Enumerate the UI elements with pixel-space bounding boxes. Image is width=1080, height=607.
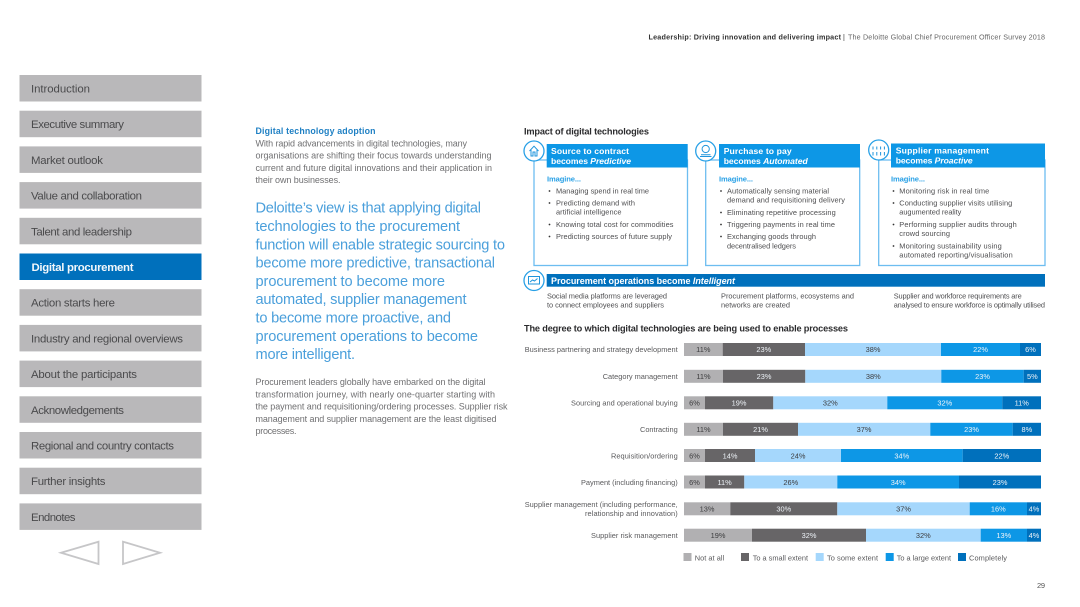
closing paragraph: processes. [256,426,296,436]
intro paragraph: With rapid advancements in digital technologies, many [256,138,468,148]
bullet list: automated reporting/visualisation [899,251,1013,260]
row: sourcing and operational buying: 19% [732,398,747,408]
nav item: Introduction [20,75,202,102]
closing paragraph: transformation journey, with nearly one-quarter starting with [256,389,495,399]
row: supplier management: 16% [991,504,1006,514]
pull quote: to become more proactive, and [256,310,451,326]
bullet list: demand and requisitioning delivery [727,196,845,205]
intro paragraph: organisations are shifting their focus towards understanding [256,151,492,161]
intro paragraph: their own businesses. [256,175,340,185]
row: supplier risk management: 4% [1029,531,1040,540]
row: supplier management: 37% [896,504,911,514]
chart legend: Completely [969,554,1007,562]
bullet list: Monitoring sustainability using [899,242,1002,251]
banner note: workforce: analysed to ensure workforce is optimally utilised [894,300,1045,309]
panel: purchase to pay [696,141,860,266]
row: supplier risk management: Supplier risk management [591,531,678,540]
pull quote: more intelligent. [256,347,355,363]
row: supplier risk management: 32% [802,531,817,540]
banner note: platforms: networks are created [721,300,790,309]
nav item: Introduction: Introduction [31,84,90,96]
row: payment: 6% [689,478,700,487]
pull quote: Deloitte’s view is that applying digital [256,201,481,217]
panel: purchase to pay: Imagine... [719,174,753,184]
text column: digital technology adoption [256,126,508,436]
nav item: Industry and regional overviews: Industry and regional overviews [31,333,183,345]
chart legend: To a large extent [897,554,951,562]
row: business partnering: 11% [696,345,711,354]
row: business partnering: 23% [756,345,772,354]
bullet list: augumented reality [899,208,962,217]
row: contracting: 21% [753,425,768,434]
icon: next arrow [123,542,160,564]
panel: supplier management [869,140,1045,266]
row: business partnering: Business partnering and strategy development [525,345,678,354]
bullet list [720,187,845,251]
panel: source to contract: Source to contract [551,146,629,156]
bullet list [549,187,674,241]
row: contracting: 37% [857,425,872,434]
row: requisition/ordering [611,449,1041,462]
row: business partnering [525,343,1041,356]
row: requisition/ordering: 22% [994,451,1010,460]
panel: procurement operations banner [524,270,1045,309]
panel: supplier management: Supplier management [896,146,989,156]
row: category management: Category management [603,372,678,381]
heading: impact of digital technologies: Impact of digital technologies [524,126,649,136]
closing paragraph: Procurement leaders globally have embarked on the digital [256,377,486,387]
bullet list: Managing spend in real time [556,187,649,196]
banner note: social media: to connect employees and suppliers [547,300,664,309]
panel: procurement operations banner: Procurement operations become Intelligent [551,276,736,286]
row: category management [603,370,1041,383]
row: sourcing and operational buying: 32% [937,398,953,408]
row: payment: 26% [783,478,799,487]
panel: purchase to pay: Purchase to pay [724,146,792,156]
row: sourcing and operational buying: 6% [689,398,700,408]
nav item: Digital procurement (active): Digital procurement [32,262,134,274]
row: contracting: 8% [1021,425,1033,434]
pull quote: automated, supplier management [256,292,466,308]
row: contracting: Contracting [640,425,678,434]
bullet list: Monitoring risk in real time [899,187,989,196]
banner note: workforce: Supplier and workforce requirements are [894,291,1022,300]
icon: group of people [869,140,889,160]
nav item: Digital procurement (active) [20,254,202,280]
banner note: workforce [894,291,1045,309]
row: sourcing and operational buying: 32% [823,398,838,408]
banner note: platforms [721,291,854,309]
row: business partnering: 6% [1025,345,1036,354]
sidebar navigation [20,75,202,530]
nav item: Action starts here [20,289,202,316]
chart legend: To some extent [827,554,878,562]
row: supplier management: 13% [700,504,715,514]
row: payment: 11% [717,478,732,487]
banner note: social media: Social media platforms are leveraged [547,291,667,300]
nav item: About the participants: About the participants [31,369,137,381]
row: supplier risk management [591,529,1041,542]
nav item: Further insights [20,468,202,494]
panel: source to contract [524,141,688,266]
nav item: Value and collaboration: Value and collaboration [31,191,142,203]
row: payment: Payment (including financing) [581,478,678,487]
nav item: Industry and regional overviews [20,325,202,351]
panel: supplier management: becomes Proactive [896,156,973,166]
row: payment: 23% [993,478,1008,487]
row: contracting: 11% [696,425,711,434]
bullet list: Automatically sensing material [727,187,829,196]
nav item: Value and collaboration [20,182,202,209]
running header [648,32,1045,42]
row: category management: 23% [757,372,772,381]
nav item: Acknowledgements: Acknowledgements [31,405,124,417]
bullet list: Knowing total cost for commodities [556,220,674,229]
bullet list: Performing supplier audits through [899,220,1017,229]
bullet list: Eliminating repetitive processing [727,208,836,217]
pull quote: function will enable strategic sourcing to [256,237,505,253]
pull quote: procurement to become more [256,274,445,290]
row: supplier risk management: 13% [996,531,1012,540]
row: supplier risk management: 19% [711,531,726,540]
bullet list: Triggering payments in real time [727,220,835,229]
closing paragraph: management and supplier management are the least digitised [256,414,496,424]
bullet list: artificial intelligence [556,208,622,217]
nav item: Executive summary [20,111,202,137]
running header: The Deloitte Global Chief Procurement Officer Survey 2018 [848,32,1045,42]
row: category management: 5% [1027,372,1038,381]
bullet list [893,187,1017,260]
nav item: Executive summary: Executive summary [31,119,124,131]
row: sourcing and operational buying: 11% [1015,398,1029,408]
icon: lightbulb and people [696,141,716,161]
panel: source to contract: becomes Predictive [551,156,631,166]
row: supplier management [525,500,1041,518]
row: supplier risk management: 32% [916,531,931,540]
panel: source to contract: Imagine... [547,174,581,184]
running header: | [843,32,845,42]
icon: laptop chart [524,270,544,290]
running header: Leadership: Driving innovation and delivering impact [648,32,842,42]
chart legend: To a small extent [753,554,808,562]
bullet list: decentralised ledgers [727,242,796,251]
row: contracting [640,423,1041,436]
row: supplier management: 30% [776,504,792,514]
heading: digital technology adoption: Digital technology adoption [256,126,376,136]
row: sourcing and operational buying [571,396,1041,409]
row: requisition/ordering: Requisition/ordering [611,451,678,460]
nav item: Further insights: Further insights [31,476,106,488]
row: supplier management: Supplier management (including performance, [525,500,678,509]
bullet list: Conducting supplier visits utilising [899,199,1012,208]
intro paragraph [256,138,492,185]
row: requisition/ordering: 14% [723,451,738,460]
icon: house [524,141,544,161]
banner note: social media [547,291,667,309]
row: contracting: 23% [964,425,979,434]
row: supplier management: 4% [1029,504,1040,514]
row: requisition/ordering: 6% [689,451,700,460]
row: category management: 23% [975,372,990,381]
row: payment: 34% [891,478,906,487]
nav item: Talent and leadership [20,218,202,244]
chart legend [684,553,1007,562]
row: supplier management: relationship and innovation) [585,509,678,518]
nav item: Endnotes: Endnotes [31,512,76,524]
nav item: Market outlook [20,146,202,173]
nav item: Regional and country contacts [20,432,202,458]
panel: supplier management: Imagine... [891,174,925,184]
nav item: About the participants [20,361,202,387]
bullet list: Predicting sources of future supply [556,232,672,241]
chart legend: Not at all [695,554,725,562]
row: payment [581,476,1041,488]
intro paragraph: current and future digital innovations and their application in [256,163,492,173]
bullet list: crowd sourcing [899,229,950,238]
closing paragraph: the payment and requisitioning/ordering processes. Supplier risk [256,402,508,412]
icon: previous arrow [61,542,98,564]
pull quote: procurement operations to become [256,329,478,345]
pull quote [256,201,505,363]
row: category management: 11% [696,372,711,381]
row: requisition/ordering: 34% [894,451,910,460]
closing paragraph [256,377,508,436]
row: sourcing and operational buying: Sourcing and operational buying [571,398,678,408]
banner note: platforms: Procurement platforms, ecosystems and [721,291,854,300]
pull quote: become more predictive, transactional [256,256,495,272]
row: business partnering: 22% [973,345,988,354]
nav item: Endnotes [20,503,202,530]
page number: 29 [1037,581,1045,590]
bullet list: Predicting demand with [556,199,635,208]
nav item: Talent and leadership: Talent and leadership [31,226,132,238]
bullet list: Exchanging goods through [727,232,816,241]
heading: degree of digital technology use: The degree to which digital technologies are being used to enable processes [524,324,848,334]
row: business partnering: 38% [866,345,881,354]
nav item: Acknowledgements [20,396,202,423]
pull quote: technologies to the procurement [256,219,460,235]
nav item: Action starts here: Action starts here [31,298,115,310]
stacked bar chart [525,343,1041,542]
nav item: Market outlook: Market outlook [31,155,103,167]
row: category management: 38% [866,372,881,381]
row: requisition/ordering: 24% [791,451,806,460]
panel: purchase to pay: becomes Automated [724,156,808,166]
nav item: Regional and country contacts: Regional and country contacts [31,440,174,452]
